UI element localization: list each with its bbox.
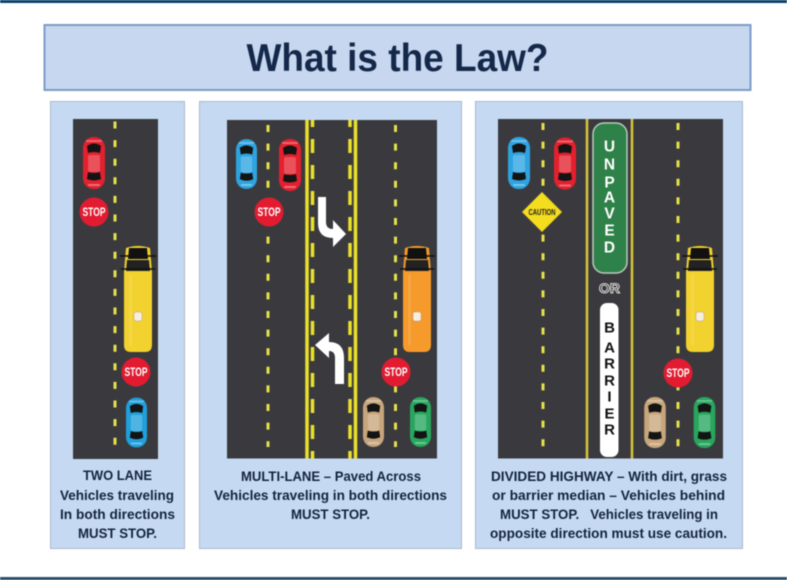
caption: divided highway: DIVIDED HIGHWAY – With dirt, grass: [491, 468, 727, 484]
tan car: [644, 397, 666, 448]
barrier median sign: I: [607, 388, 612, 406]
red car: [554, 138, 576, 190]
caption: two lane: MUST STOP.: [78, 525, 157, 541]
barrier median sign: R: [604, 422, 615, 438]
road: multi-lane: [227, 120, 437, 458]
or label: OR: [599, 280, 620, 296]
left lane line: [542, 123, 544, 447]
unpaved median sign: [593, 123, 627, 273]
green car: [410, 397, 431, 447]
stop sign on bus side: [382, 358, 410, 386]
unpaved median sign: D: [604, 240, 615, 256]
stop sign: STOP: [258, 207, 281, 219]
barrier median sign: E: [604, 406, 615, 422]
school bus: [120, 246, 156, 352]
school bus: [682, 246, 718, 352]
orange bus: [399, 246, 435, 352]
center line: [114, 122, 116, 447]
stop sign: [254, 198, 284, 226]
title: What is the Law?: [246, 37, 548, 80]
caution sign: [522, 192, 562, 232]
panel: divided highway: [476, 102, 742, 548]
arrow: right turn: [318, 197, 346, 247]
caption: divided highway: MUST STOP. Vehicles traveling in: [500, 506, 718, 522]
unpaved median sign: U: [604, 138, 615, 156]
caption: divided highway: opposite direction must use caution.: [490, 525, 727, 541]
caption: multi-lane: MUST STOP.: [291, 506, 370, 522]
top edge bar: [0, 0, 787, 3]
green car: [694, 397, 715, 448]
stop sign on bus side: [122, 358, 150, 386]
road: divided highway: [498, 119, 723, 458]
panel: multi-lane: [200, 102, 462, 548]
blue car: [236, 139, 257, 189]
blue car: [508, 137, 530, 189]
stop sign: STOP: [82, 207, 106, 219]
title banner: [44, 25, 750, 90]
stop sign: [664, 358, 692, 388]
bottom edge bar: [0, 577, 787, 580]
blue car: [126, 398, 147, 447]
left lane line: [266, 125, 270, 447]
caution sign: CAUTION: [528, 207, 556, 217]
stop sign on bus side: STOP: [384, 367, 408, 379]
unpaved median sign: N: [604, 156, 615, 174]
caption: two lane: TWO LANE: [83, 467, 152, 483]
barrier median sign: B: [604, 320, 615, 336]
barrier median sign: A: [604, 340, 615, 356]
caption: two lane: Vehicles traveling: [60, 487, 174, 503]
road: two lane: [73, 119, 158, 459]
stop sign: STOP: [666, 368, 690, 380]
median edge lines: [587, 119, 632, 458]
red car: [83, 137, 105, 189]
unpaved median sign: E: [604, 222, 615, 240]
barrier median sign: R: [604, 356, 615, 372]
right lane line: [394, 125, 397, 447]
right lane line: [676, 123, 680, 447]
caption: two lane: In both directions: [60, 506, 175, 522]
stop sign: [80, 198, 108, 226]
caption: multi-lane: Vehicles traveling in both directions: [214, 487, 447, 503]
caption: divided highway: or barrier median – Vehicles behind: [492, 487, 725, 503]
caption: divided highway: [490, 468, 727, 541]
barrier median sign: R: [604, 372, 615, 390]
unpaved median sign: V: [604, 206, 615, 222]
barrier median sign: [600, 303, 618, 457]
red car: [279, 139, 301, 191]
caption: two lane: [60, 467, 175, 541]
arrow: left turn: [315, 333, 344, 384]
caption: multi-lane: [214, 468, 447, 522]
stop sign on bus side: STOP: [124, 367, 148, 379]
panel: two lane: [50, 102, 184, 548]
tan car: [363, 397, 384, 447]
caption: multi-lane: MULTI-LANE – Paved Across: [241, 468, 421, 484]
center turn lane lines: [307, 120, 356, 458]
unpaved median sign: P: [604, 174, 615, 192]
unpaved median sign: A: [604, 190, 615, 206]
